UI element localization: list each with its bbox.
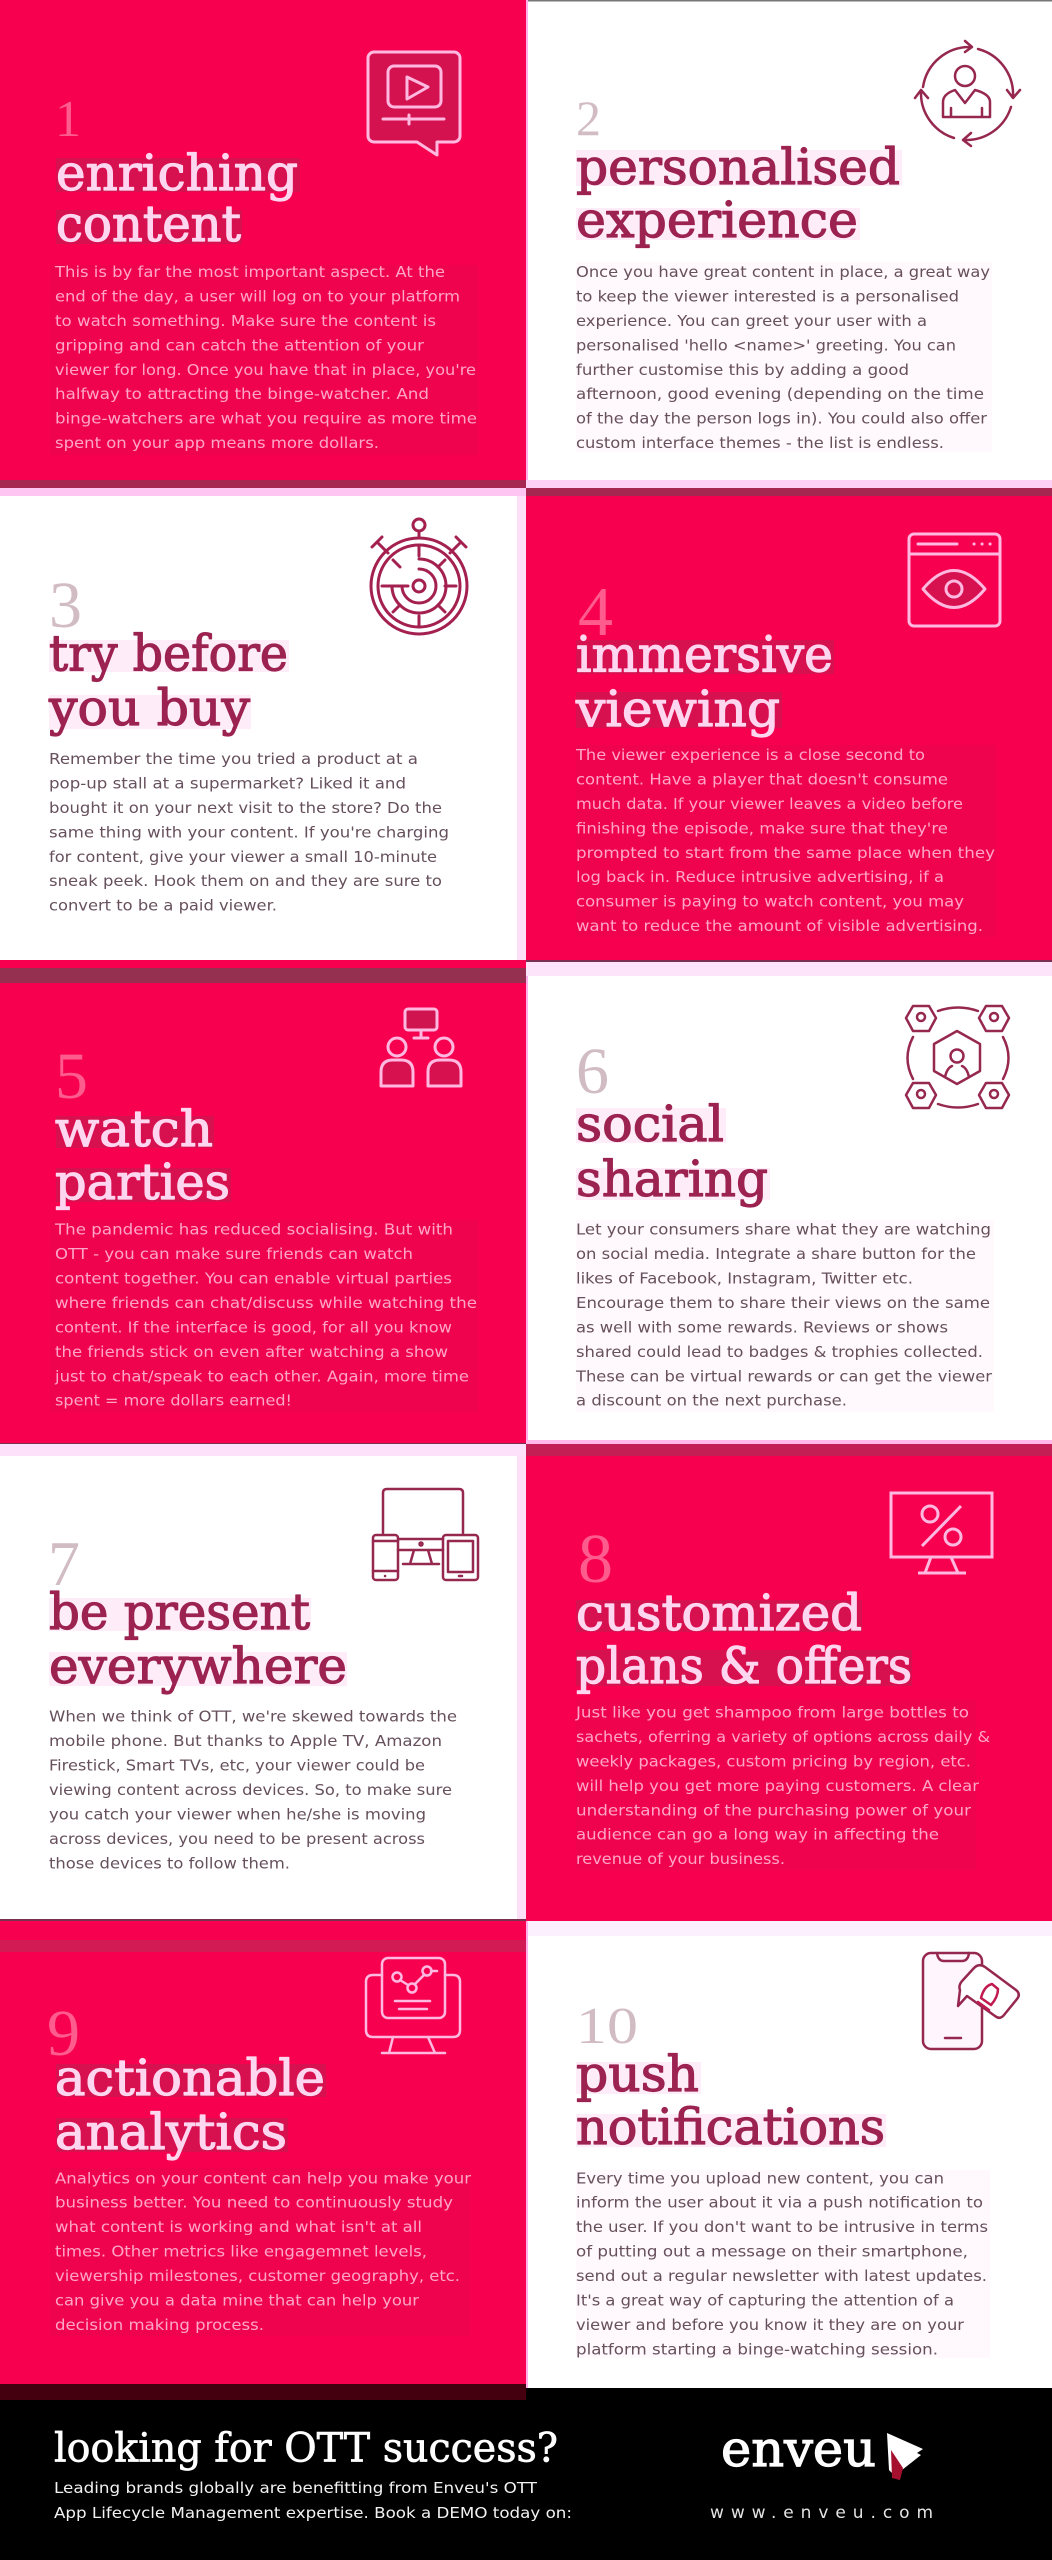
footer text	[54, 2479, 572, 2522]
body text 6: These can be virtual rewards or can get the viewer	[575, 1367, 993, 1385]
body text 10: inform the user about it via a push notification to	[576, 2194, 983, 2212]
body text 7: across devices, you need to be present across	[49, 1830, 425, 1848]
body text 1: to watch something. Make sure the content is	[55, 312, 436, 330]
heading: immersive viewing	[575, 626, 833, 738]
body text 7: When we think of OTT, we're skewed towards the	[49, 1708, 457, 1726]
icon: phone with bell notification	[923, 1953, 1019, 2049]
footer: call to action	[0, 2384, 1052, 2560]
heading: social sharing: sharing	[576, 1150, 768, 1208]
body text 2: to keep the viewer interested is a personalised	[576, 287, 959, 305]
body text 5: the friends stick on even after watching a show	[55, 1343, 448, 1361]
body text 3: pop-up stall at a supermarket? Liked it and	[49, 774, 406, 792]
body text 8: weekly packages, custom pricing by region, etc.	[576, 1753, 971, 1771]
body text 5: OTT - you can make sure friends can watch	[55, 1245, 413, 1263]
heading: enriching content	[56, 144, 298, 253]
body text 3: sneak peek. Hook them on and they are sure to	[49, 872, 442, 890]
heading: customized plans and offers	[576, 1584, 912, 1695]
body text 4: much data. If your viewer leaves a video before	[576, 795, 963, 813]
footer text: App Lifecycle Management expertise. Book a DEMO today on:	[54, 2504, 572, 2522]
body text 4: content. Have a player that doesn't consume	[576, 770, 948, 788]
heading: be present everywhere	[49, 1583, 347, 1695]
body text 10: of putting out a message on their smartphone,	[576, 2243, 968, 2261]
body text 1: end of the day, a user will log on to your platform	[55, 287, 460, 305]
body text 1: viewer for long. Once you have that in place, you're	[55, 361, 476, 379]
body text 8	[575, 1704, 990, 1868]
body text 8: revenue of your business.	[576, 1850, 785, 1868]
heading: immersive viewing: viewing	[575, 680, 780, 738]
panel 3: try before you buy	[0, 496, 526, 968]
body text 3: same thing with your content. If you're charging	[49, 823, 449, 841]
body text 4	[575, 746, 995, 935]
icon: stopwatch	[371, 519, 467, 634]
heading: watch parties: parties	[55, 1153, 230, 1211]
body text 5: spent = more dollars earned!	[55, 1392, 292, 1410]
body text 4: finishing the episode, make sure that they're	[576, 819, 948, 837]
body text 4: The viewer experience is a close second to	[575, 746, 925, 764]
icon: person in rotating arrows	[915, 41, 1020, 146]
logo wordmark: enveu: enveu	[721, 2420, 876, 2478]
heading: customized plans and offers: customized	[576, 1584, 862, 1642]
body text 8: will help you get more paying customers. A clear	[576, 1777, 980, 1795]
icon: monitor with percent	[891, 1493, 992, 1573]
heading: watch parties: watch	[55, 1100, 213, 1158]
icon: monitor with analytics graph	[366, 1958, 460, 2053]
body text 9: times. Other metrics like engagemnet levels,	[55, 2243, 427, 2261]
body text 4: want to reduce the amount of visible advertising.	[576, 917, 983, 935]
heading: actionable analytics: analytics	[55, 2103, 287, 2161]
heading: push notifications: push	[576, 2045, 699, 2103]
heading: personalised experience: experience	[576, 191, 858, 249]
body text 7: viewing content across devices. So, to make sure	[49, 1781, 452, 1799]
body text 3: bought it on your next visit to the store? Do the	[49, 799, 442, 817]
body text 6: Encourage them to share their views on the same	[576, 1294, 990, 1312]
body text 7: those devices to follow them.	[49, 1854, 290, 1872]
body text 10	[576, 2169, 988, 2358]
panel 6: social sharing	[526, 960, 1052, 1444]
body text 2: personalised 'hello <name>' greeting. You can	[576, 336, 956, 354]
body text 2: of the day the person logs in). You could also offer	[576, 410, 988, 428]
body text 6: on social media. Integrate a share button for the	[576, 1245, 976, 1263]
panel 8: customized plans and offers	[526, 1444, 1052, 1921]
body text 6: likes of Facebook, Instagram, Twitter etc.	[576, 1269, 913, 1287]
heading: push notifications	[576, 2045, 885, 2156]
heading: actionable analytics: actionable	[55, 2049, 325, 2107]
panel 4: immersive viewing	[526, 488, 1052, 960]
panel 9: actionable analytics	[0, 1921, 526, 2385]
number 1: 1	[55, 91, 81, 148]
body text 10: platform starting a binge-watching session.	[576, 2340, 938, 2358]
heading: customized plans and offers: plans & offers	[576, 1637, 912, 1695]
body text 10: It's a great way of capturing the attention of a	[576, 2292, 954, 2310]
icon: connected user hexagons	[906, 1006, 1009, 1108]
body text 1: binge-watchers are what you require as more time	[55, 410, 477, 428]
body text 3: convert to be a paid viewer.	[49, 897, 277, 915]
icon: monitor, phone and tablet	[373, 1489, 478, 1580]
body text 10: viewer and before you know it they are on your	[576, 2316, 965, 2334]
body text 6	[575, 1220, 993, 1410]
heading: try before you buy: try before	[49, 625, 288, 683]
number 8: 8	[578, 1521, 613, 1598]
number 5: 5	[55, 1040, 88, 1113]
panel 7: be present everywhere	[0, 1456, 526, 1921]
number 6: 6	[576, 1035, 609, 1108]
body text 5: content together. You can enable virtual parties	[55, 1269, 452, 1287]
body text 4: prompted to start from the same place when they	[576, 844, 995, 862]
number 4: 4	[578, 574, 613, 651]
heading: try before you buy: you buy	[48, 679, 251, 737]
body text 1: spent on your app means more dollars.	[55, 434, 379, 452]
body text 5	[54, 1220, 477, 1410]
panel 10: push notifications	[526, 1921, 1052, 2388]
body text 8: understanding of the purchasing power of your	[576, 1801, 972, 1819]
body text 9: can give you a data mine that can help your	[55, 2292, 420, 2310]
heading: push notifications: notifications	[576, 2098, 885, 2156]
body text 7: you catch your viewer when he/she is moving	[49, 1805, 426, 1823]
body text 9	[55, 2169, 472, 2334]
body text 6: Let your consumers share what they are watching	[576, 1220, 991, 1238]
body text 4: log back in. Reduce intrusive advertising, if a	[576, 868, 944, 886]
body text 7	[49, 1708, 457, 1872]
icon: browser window with eye	[909, 534, 1000, 626]
number 3: 3	[49, 569, 82, 642]
heading: be present everywhere: everywhere	[49, 1637, 347, 1695]
number 2: 2	[576, 90, 601, 146]
number 7: 7	[48, 1528, 80, 1599]
body text 2: experience. You can greet your user with a	[576, 312, 927, 330]
body text 9: Analytics on your content can help you make your	[55, 2169, 472, 2187]
body text 8: audience can go a long way in affecting the	[576, 1826, 939, 1844]
body text 2: afternoon, good evening (depending on the time	[576, 385, 984, 403]
body text 9: viewership milestones, customer geography, etc.	[55, 2267, 460, 2285]
body text 2: further customise this by adding a good	[576, 361, 909, 379]
heading: watch parties	[55, 1100, 230, 1211]
body text 6: a discount on the next purchase.	[576, 1392, 847, 1410]
number 9: 9	[47, 1997, 80, 2070]
heading: enriching content: content	[56, 195, 241, 253]
body text 1: halfway to attracting the binge-watcher. And	[55, 385, 429, 403]
body text 10: the user. If you don't want to be intrusive in terms	[576, 2218, 988, 2236]
website address: www.enveu.com	[710, 2503, 933, 2523]
panel 2: personalised experience	[526, 0, 1052, 488]
icon: video speech bubble	[368, 52, 460, 155]
body text 9: business better. You need to continuously study	[55, 2194, 453, 2212]
heading: personalised experience	[576, 138, 900, 249]
body text 9: what content is working and what isn't at all	[55, 2218, 422, 2236]
number 10: 10	[576, 1998, 638, 2055]
body text 10: Every time you upload new content, you can	[576, 2169, 944, 2187]
body text 1	[54, 263, 477, 452]
footer heading: looking for OTT success?	[54, 2426, 558, 2472]
heading: enriching content: enriching	[56, 144, 298, 202]
body text 2	[576, 263, 990, 452]
body text 2: Once you have great content in place, a great way	[576, 263, 990, 281]
body text 2: custom interface themes - the list is endless.	[576, 434, 944, 452]
body text 5: The pandemic has reduced socialising. But with	[54, 1220, 453, 1238]
body text 4: consumer is paying to watch content, you may	[576, 893, 964, 911]
body text 7: Firestick, Smart TVs, etc, your viewer could be	[49, 1757, 425, 1775]
body text 5: where friends can chat/discuss while watching the	[55, 1294, 477, 1312]
body text 8: sachets, oferring a variety of options across daily &	[576, 1728, 990, 1746]
body text 7: mobile phone. But thanks to Apple TV, Amazon	[49, 1732, 442, 1750]
body text 1: gripping and can catch the attention of your	[55, 336, 425, 354]
heading: personalised experience: personalised	[576, 138, 900, 196]
footer text: Leading brands globally are benefitting from Enveu's OTT	[54, 2479, 538, 2497]
body text 5: just to chat/speak to each other. Again, more time	[54, 1367, 469, 1385]
logo icon: arrow	[887, 2433, 923, 2480]
body text 5: content. If the interface is good, for all you know	[55, 1318, 452, 1336]
body text 6: shared could lead to badges & trophies collected.	[576, 1343, 983, 1361]
heading: be present everywhere: be present	[49, 1583, 310, 1641]
heading: immersive viewing: immersive	[576, 626, 833, 684]
body text 10: send out a regular newsletter with latest updates.	[576, 2267, 987, 2285]
icon: monitor and two people	[381, 1009, 461, 1086]
body text 9: decision making process.	[55, 2316, 264, 2334]
body text 6: as well with some rewards. Reviews or shows	[576, 1318, 948, 1336]
body text 3: for content, give your viewer a small 10-minute	[49, 848, 437, 866]
heading: actionable analytics	[55, 2049, 325, 2161]
body text 1: This is by far the most important aspect. At the	[54, 263, 445, 281]
heading: social sharing: social	[576, 1095, 724, 1153]
body text 8: Just like you get shampoo from large bottles to	[575, 1704, 969, 1722]
body text 3	[49, 750, 449, 915]
body text 3: Remember the time you tried a product at a	[49, 750, 418, 768]
panel 5: watch parties	[0, 968, 526, 1456]
panel 1: enriching content	[0, 0, 526, 496]
heading: social sharing	[576, 1095, 768, 1208]
heading: try before you buy	[48, 625, 288, 737]
